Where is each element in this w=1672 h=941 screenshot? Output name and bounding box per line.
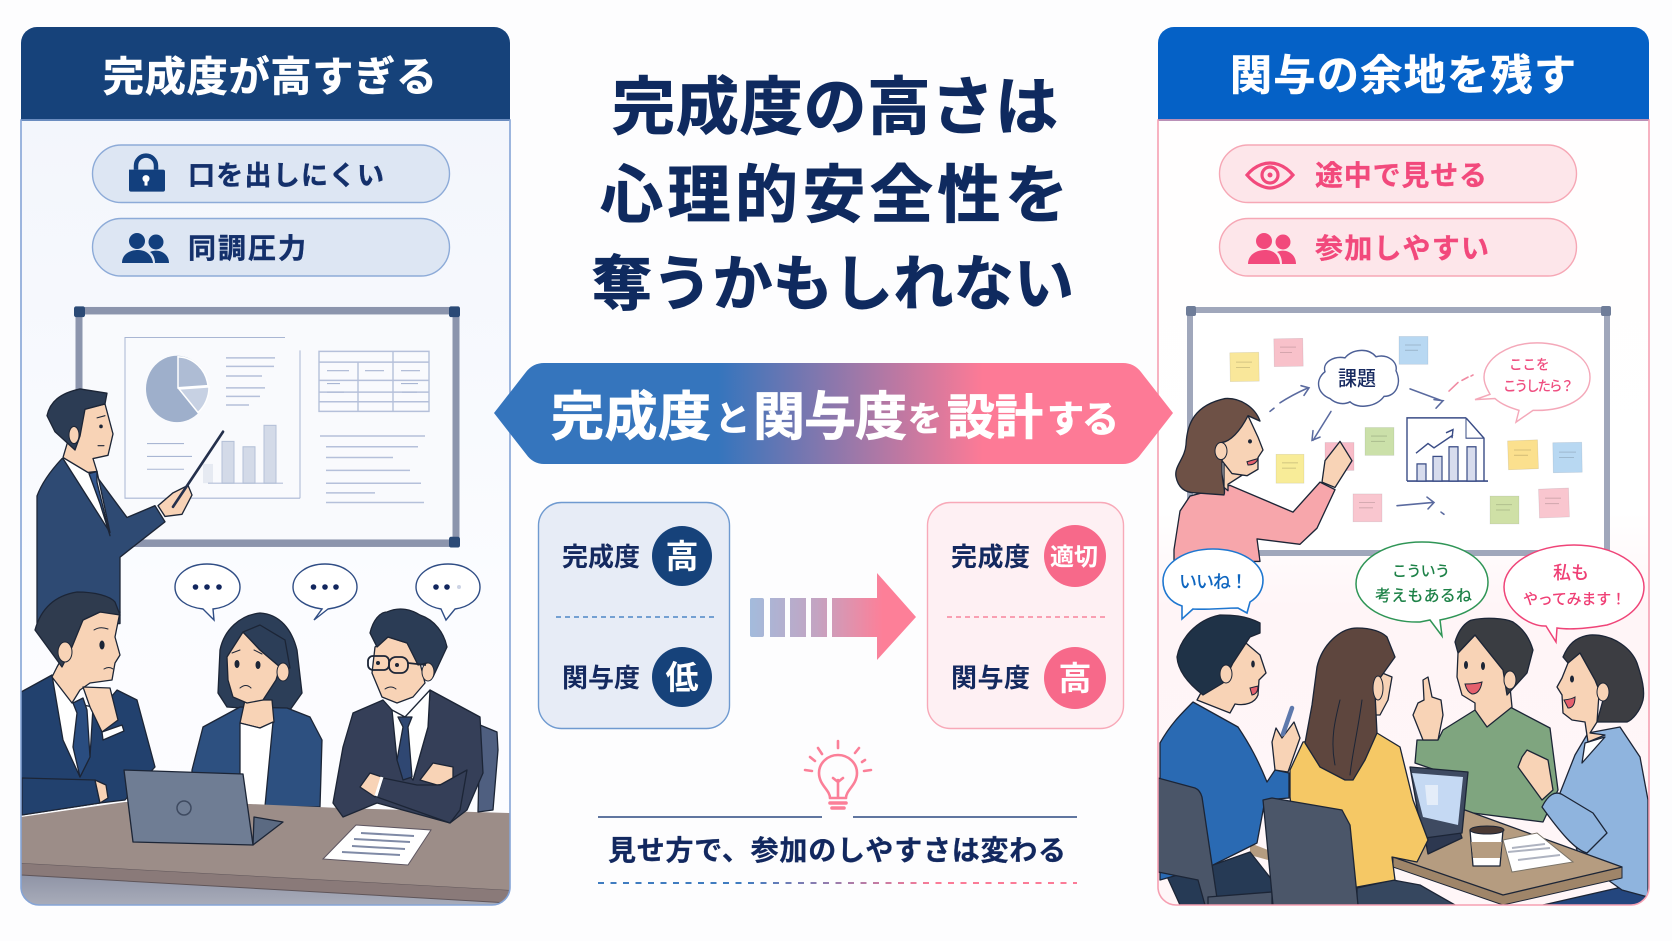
sleeve and hand: woman in light blue	[1518, 750, 1607, 853]
speech bubble: nice: いいね！	[1179, 572, 1248, 592]
icon: eye	[1247, 163, 1293, 188]
heading: too complete: 完成度が高すぎる	[103, 54, 437, 100]
coffee cup	[1470, 826, 1504, 866]
banner: design completeness and involvement	[494, 363, 1173, 464]
person: woman at whiteboard	[1174, 398, 1352, 561]
speech bubble: I will try too	[1504, 545, 1644, 642]
heading: leave room: 関与の余地を残す	[1230, 52, 1576, 99]
takeaway text: 見せ方で、参加のしやすさは変わる	[608, 835, 1066, 866]
card: target state: 完成度	[951, 542, 1030, 572]
pill: show midway: 途中で見せる	[1315, 160, 1487, 191]
card: current state: 完成度	[562, 542, 640, 572]
table	[319, 351, 429, 411]
speech bubbles: silence	[175, 564, 480, 620]
chair: left	[1158, 778, 1272, 905]
badge: appropriate	[1044, 525, 1106, 587]
banner: design completeness and involvement: する	[1047, 399, 1119, 440]
person: man in green sweater	[1413, 618, 1558, 822]
pill: peer pressure: 同調圧力	[188, 233, 306, 264]
person: seated man with glasses, arms crossed	[333, 609, 498, 823]
pill: easy to join: 参加しやすい	[1315, 233, 1489, 264]
icon: people	[122, 233, 169, 263]
illustration: collaborative session	[1158, 306, 1649, 910]
badge: high: 高	[666, 538, 698, 575]
icon: people	[1248, 233, 1296, 264]
banner: design completeness and involvement: 関与度	[753, 389, 907, 447]
person: woman in light blue	[1543, 635, 1649, 910]
cloud: issue: 課題	[1338, 368, 1376, 391]
pill: hard to speak	[92, 145, 450, 202]
icon: light bulb	[805, 741, 871, 808]
cloud: issue	[1319, 350, 1398, 406]
badge: high: 高	[1058, 660, 1092, 697]
speech bubble: what if: こうしたら？	[1503, 378, 1574, 394]
pill: peer pressure	[92, 218, 450, 276]
person: man in blue shirt	[1160, 615, 1300, 905]
banner: design completeness and involvement: 完成度	[551, 388, 711, 447]
arrow: transition	[750, 573, 916, 660]
speech bubble: this idea too: こういう	[1392, 563, 1450, 580]
person: seated man, worried	[21, 592, 155, 815]
paper on meeting table	[1503, 833, 1573, 872]
whiteboard: finished slides	[74, 306, 460, 547]
pill: easy to join	[1220, 218, 1576, 276]
main title: 心理的安全性を	[600, 161, 1068, 231]
main title: 奪うかもしれない	[592, 251, 1074, 318]
main title	[592, 73, 1074, 318]
badge: low	[652, 647, 712, 707]
speech bubble: what if: ここを	[1509, 356, 1549, 373]
pie chart	[146, 356, 209, 422]
card: target state: 関与度	[951, 663, 1030, 693]
banner: design completeness and involvement: を	[908, 401, 942, 439]
banner: design completeness and involvement: と	[715, 400, 750, 439]
badge: high	[652, 526, 712, 586]
speech bubble: I will try too: やってみます！	[1523, 591, 1626, 608]
banner: design completeness and involvement: 設計	[947, 392, 1043, 445]
speech bubble: I will try too: 私も	[1553, 563, 1589, 583]
meeting table	[1250, 810, 1622, 905]
badge: low: 低	[666, 659, 698, 696]
whiteboard frame	[1186, 306, 1611, 553]
person: woman in yellow from behind	[1290, 628, 1455, 910]
panel header: too complete	[21, 27, 510, 121]
panel header: leave room	[1158, 27, 1649, 121]
speech bubble: nice	[1163, 549, 1263, 619]
badge: high	[1044, 647, 1106, 709]
icon: lock	[129, 156, 165, 192]
whiteboard: work in progress	[1230, 336, 1590, 524]
sticky notes	[1230, 336, 1582, 524]
card: target state	[928, 502, 1124, 728]
panel: too complete	[21, 27, 510, 940]
pill: hard to speak: 口を出しにくい	[188, 161, 384, 191]
main title: 完成度の高さは	[612, 73, 1058, 143]
card: current state	[538, 502, 730, 728]
card: current state: 関与度	[562, 663, 640, 693]
document on table	[323, 825, 431, 865]
illustration: formal presentation	[21, 306, 510, 940]
conference table	[22, 802, 510, 904]
sketched chart	[1407, 418, 1488, 481]
bar chart	[203, 425, 283, 483]
speech bubble: what if	[1475, 343, 1590, 422]
sketch arrows	[1270, 386, 1444, 514]
panel: leave room for involvement	[1158, 27, 1649, 910]
chair: front	[1263, 798, 1358, 905]
laptop on meeting table	[1410, 767, 1468, 854]
laptop	[124, 770, 283, 845]
speech bubble: this idea too	[1356, 542, 1488, 636]
person: presenter	[37, 389, 223, 624]
person: seated woman, worried	[192, 613, 322, 807]
badge: appropriate: 適切	[1050, 544, 1098, 571]
speech bubble: this idea too: 考えもあるね	[1375, 587, 1472, 605]
pill: show midway	[1220, 145, 1576, 202]
